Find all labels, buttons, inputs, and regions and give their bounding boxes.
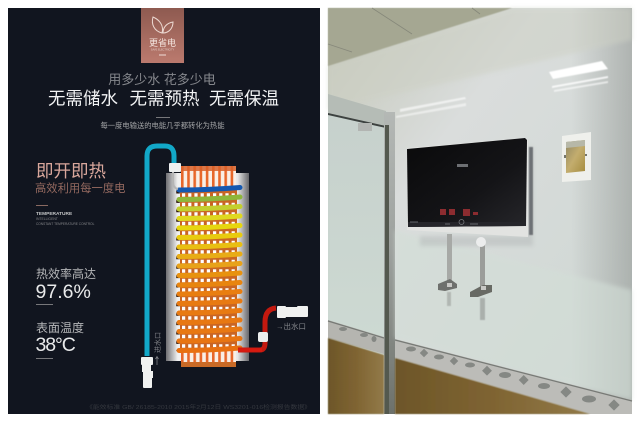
water pipes (438, 234, 492, 320)
heading: instant heat: 即开即热 (36, 161, 106, 181)
temperature label: CONSTANT TEMPERATURE CONTROL (36, 222, 95, 226)
inner connector (173, 172, 178, 189)
stat: surface temperature: 表面温度 (36, 320, 84, 335)
photo: installed water heater (328, 8, 632, 414)
outlet pipe: red (238, 308, 276, 350)
brown lower tiles (328, 338, 590, 414)
heading: three no-need claims: 无需预热 (130, 88, 200, 108)
ceiling (328, 8, 512, 66)
short divider (156, 117, 170, 118)
footnote: 《能效标准 GB/ 26185-2010 2015年2月12日 WS3201-016检测报告数据》 (86, 403, 311, 411)
label: outlet: →出水口 (276, 321, 306, 331)
subheading: 高效利用每一度电 (35, 181, 125, 195)
wall (328, 8, 632, 414)
water heater unit (407, 138, 528, 237)
heating element fins (181, 166, 236, 190)
outlet valve (277, 306, 308, 318)
heading: three no-need claims: 无需保温 (209, 88, 279, 108)
tank cylinder (166, 173, 249, 361)
top fitting (169, 163, 181, 172)
heading: three no-need claims: 无需储水 (48, 88, 118, 108)
light reflections (396, 61, 608, 118)
decorative tile band (328, 320, 632, 414)
wall top shade (328, 8, 632, 110)
temperature label (36, 211, 95, 226)
lower wall tone (395, 230, 632, 400)
stat: surface temperature: 38°C (36, 334, 76, 356)
stat: surface temperature (36, 320, 84, 359)
brand mark (457, 164, 468, 167)
outlet elbow fitting (258, 332, 268, 342)
temperature label: TEMPERATURE (36, 211, 73, 217)
logo badge: SAVE ELECTRICITY (151, 48, 175, 52)
stat: thermal efficiency (36, 266, 96, 305)
red display (440, 209, 478, 216)
controls (410, 220, 478, 224)
stat: thermal efficiency: 热效率高达 (36, 266, 96, 281)
stat: thermal efficiency: 97.6% (36, 281, 91, 303)
glass door (328, 94, 388, 414)
heading: three no-need claims (48, 88, 279, 108)
sub caption: 每一度电输送的电能几乎都转化为热能 (100, 121, 225, 130)
inlet pipe: blue (147, 146, 174, 356)
temperature label: INTELLIGENT (36, 217, 58, 221)
heater diagram (141, 146, 308, 388)
panel: product poster (8, 8, 320, 414)
door frame (384, 112, 395, 414)
inlet valve (141, 357, 153, 388)
label: inlet: 进水口 (153, 332, 162, 353)
breaker box (562, 132, 591, 182)
inlet arrow (156, 356, 158, 365)
logo badge (141, 8, 184, 63)
logo badge: 更省电 (149, 37, 176, 48)
heating coil (178, 188, 240, 351)
heading: use as much water: 用多少水 花多少电 (108, 72, 216, 87)
heater shadow (420, 147, 533, 246)
